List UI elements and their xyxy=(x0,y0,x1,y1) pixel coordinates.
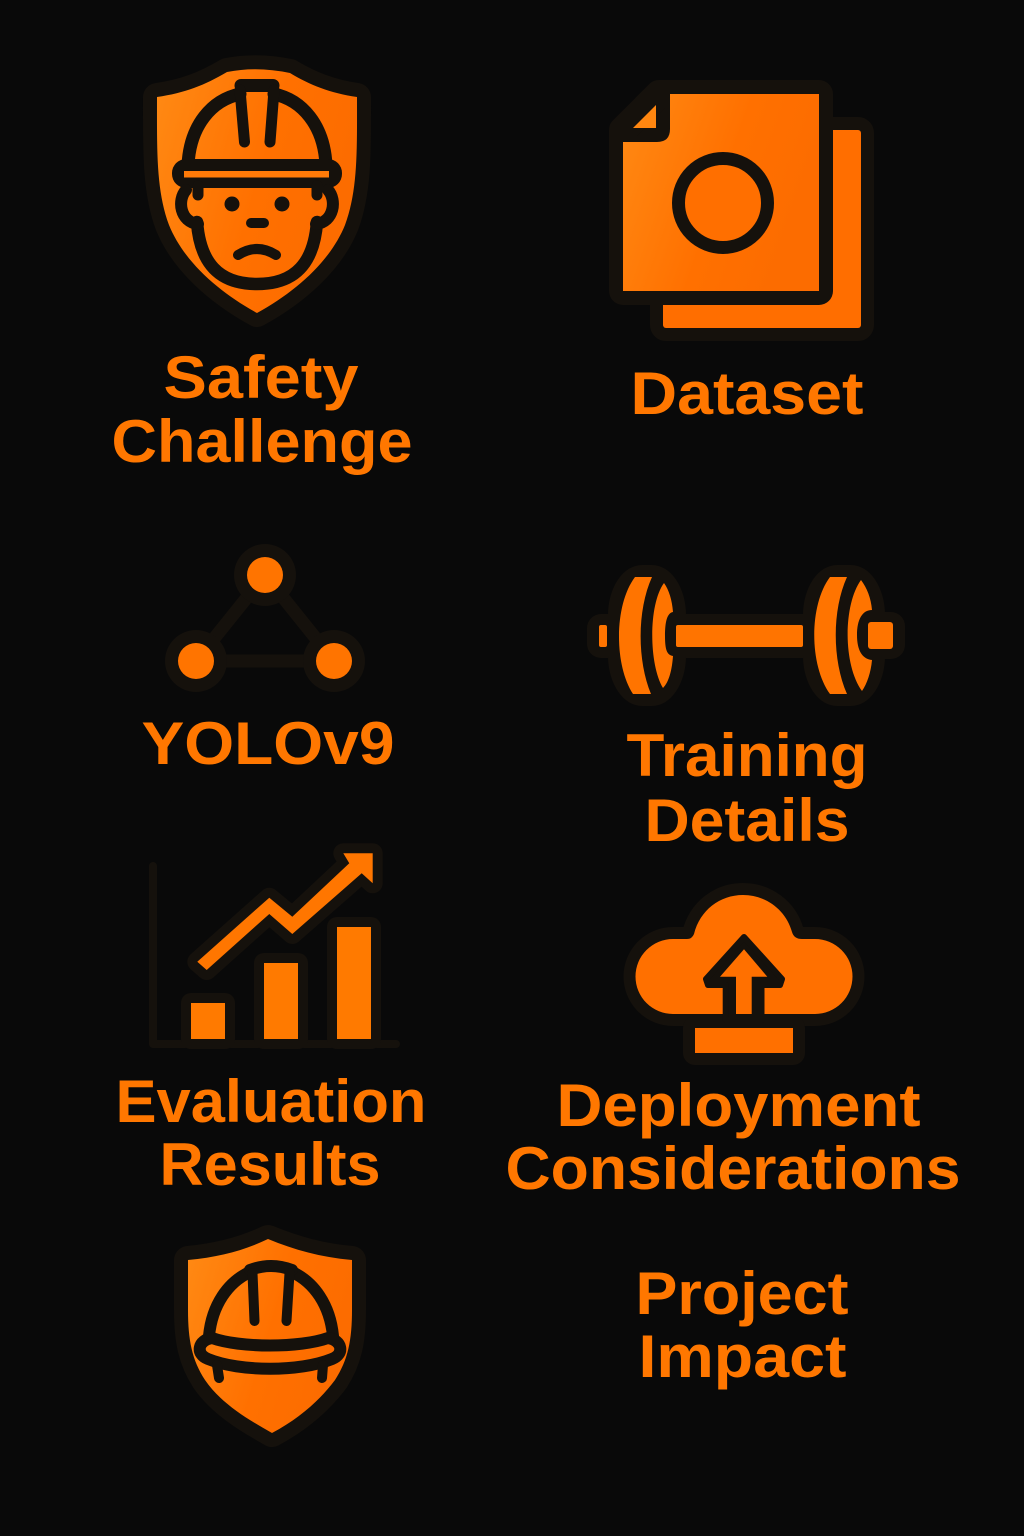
heading: Dataset: Dataset xyxy=(630,360,864,427)
heading: Evaluation Results: Results xyxy=(160,1131,380,1198)
icon: cloud upload xyxy=(636,895,852,1053)
heading: Evaluation Results: Evaluation xyxy=(116,1068,426,1135)
heading: Project Impact: Project xyxy=(636,1260,849,1327)
icon: dumbbell xyxy=(587,565,905,706)
heading: Project Impact: Impact xyxy=(638,1323,847,1390)
heading: Safety Challenge: Safety xyxy=(164,344,359,411)
heading: YOLOv9: YOLOv9 xyxy=(142,710,394,777)
heading: Safety Challenge: Challenge xyxy=(112,408,413,475)
icon: dataset stacked documents xyxy=(623,94,861,328)
icon: YOLOv9 network triangle xyxy=(165,544,365,692)
icon: worker in shield xyxy=(157,69,357,313)
heading: Project Impact xyxy=(636,1260,849,1390)
heading: Training Details: Training xyxy=(626,722,868,789)
heading: Deployment Considerations: Considerations xyxy=(506,1135,960,1202)
heading: Deployment Considerations: Deployment xyxy=(556,1072,921,1139)
heading: Training Details: Details xyxy=(644,787,850,854)
heading: Deployment Considerations xyxy=(506,1072,960,1202)
icon: hard hat in shield xyxy=(188,1239,352,1433)
icon: evaluation bar chart with rising arrow xyxy=(153,853,396,1044)
heading: Evaluation Results xyxy=(116,1068,426,1198)
heading: Training Details xyxy=(626,722,868,854)
heading: Safety Challenge xyxy=(112,344,413,475)
